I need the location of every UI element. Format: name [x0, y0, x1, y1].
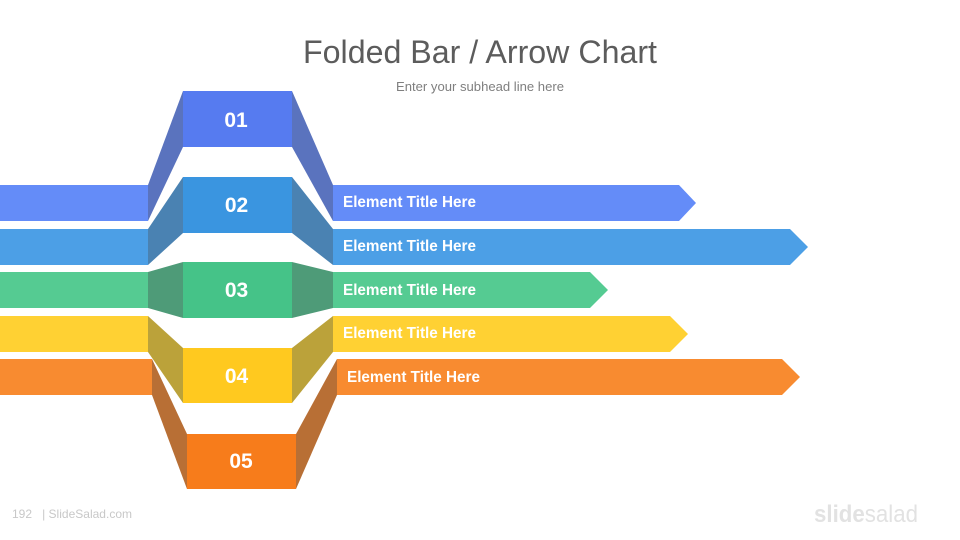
logo: slidesalad: slidesalad: [814, 501, 918, 528]
bar 05: folded arrow: 05: [229, 450, 253, 473]
bar 05: folded arrow: Element Title Here: [347, 369, 480, 386]
bar 02: folded arrow: [0, 177, 808, 265]
title: Folded Bar / Arrow Chart: [303, 34, 657, 70]
bar 03: folded arrow: Element Title Here: [343, 282, 476, 299]
chart: folded bar arrows: [0, 91, 808, 489]
bar 02: folded arrow: Element Title Here: [343, 238, 476, 255]
bar 01: folded arrow: Element Title Here: [343, 194, 476, 211]
bar 04: folded arrow: Element Title Here: [343, 325, 476, 342]
bar 04: folded arrow: [0, 316, 688, 403]
subtitle: Enter your subhead line here: [396, 79, 564, 94]
bar 01: folded arrow: [0, 91, 696, 221]
bar 05: folded arrow: [0, 359, 800, 489]
footer: page number: 192 | SlideSalad.com: [12, 507, 132, 521]
bar 03: folded arrow: 03: [225, 279, 248, 302]
bar 01: folded arrow: 01: [224, 109, 248, 132]
bar 04: folded arrow: 04: [225, 365, 248, 388]
bar 03: folded arrow: [0, 262, 608, 318]
bar 02: folded arrow: 02: [225, 194, 248, 217]
